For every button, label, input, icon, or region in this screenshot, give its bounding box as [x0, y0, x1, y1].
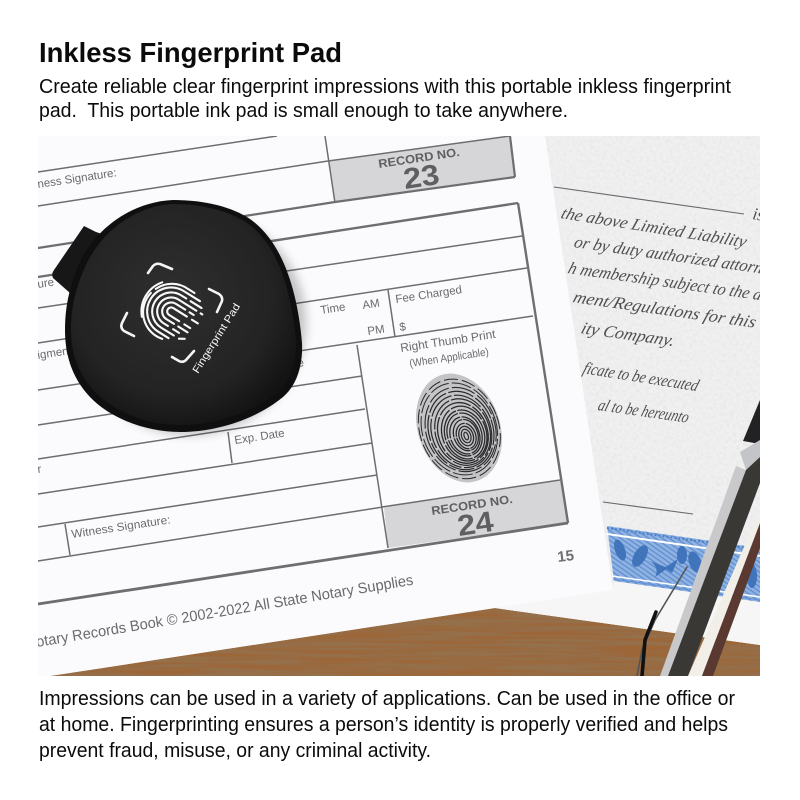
form lines [38, 136, 568, 604]
record number 23: 23 [401, 159, 442, 196]
form labels [37, 167, 497, 541]
record number 24: 24 [455, 506, 496, 543]
blue certificate border [607, 526, 760, 602]
hinge tab [52, 226, 100, 292]
device face [71, 204, 296, 425]
front page of record book [38, 136, 613, 676]
title: Inkless Fingerprint Pad [39, 37, 342, 68]
certificate document: is [751, 204, 766, 225]
record number boxes [328, 136, 568, 548]
wood table [50, 608, 760, 676]
form labels: e [297, 357, 305, 370]
form labels: ure [37, 277, 55, 291]
form labels: r [37, 464, 42, 476]
certificate document: ment/Regulations for this [571, 288, 759, 331]
intro text [39, 76, 731, 122]
form labels: Exp. Date [234, 428, 285, 447]
certificate document: ity Company. [579, 319, 678, 350]
photo: notary record book with fingerprint pad [35, 136, 766, 676]
certificate document: the above Limited Liability [559, 204, 750, 251]
device shadow [122, 224, 311, 440]
certificate document [495, 136, 766, 645]
page number: 15 [556, 547, 575, 566]
closing text: Impressions can be used in a variety of applications. Can be used in the office or [39, 688, 735, 710]
form labels: igmen [37, 345, 69, 362]
form labels: Time [320, 301, 346, 317]
intro text: Create reliable clear fingerprint impressions with this portable inkless fingerprint [39, 76, 731, 98]
form labels: Witness Signature: [71, 514, 171, 541]
closing text [39, 688, 735, 762]
inked thumb print [416, 374, 502, 482]
copyright line: otary Records Book © 2002-2022 All State Notary Supplies [35, 572, 415, 651]
scan frame brackets [121, 264, 222, 362]
form labels: AM [362, 298, 381, 312]
certificate document: al to be hereunto [596, 396, 692, 427]
fingerprint icon [140, 281, 204, 340]
form labels: (When Applicable) [409, 346, 490, 370]
record number 24 [432, 496, 512, 536]
form labels: $ [399, 321, 407, 334]
record number 24: RECORD NO. [430, 492, 514, 518]
form labels: Fee Charged [395, 284, 463, 306]
certificate document: h membership subject to the d [566, 259, 765, 304]
device label: Fingerprint Pad [190, 301, 243, 376]
certificate document: ficate to be executed [581, 359, 702, 395]
closing text: prevent fraud, misuse, or any criminal activity. [39, 740, 431, 762]
form labels: PM [367, 324, 386, 338]
fingerprint pad device [52, 200, 306, 435]
pen [660, 400, 760, 676]
closing text: at home. Fingerprinting ensures a person’s identity is properly verified and helps [39, 714, 728, 736]
certificate document: or by duty authorized attorn [572, 233, 766, 277]
form labels: Right Thumb Print [399, 327, 497, 355]
intro text: pad. This portable ink pad is small enough to take anywhere. [39, 100, 568, 122]
form labels: ness Signature: [37, 167, 117, 191]
record number 23: RECORD NO. [377, 145, 461, 171]
pen clip [637, 567, 687, 676]
record number 23 [378, 148, 460, 189]
device lip [65, 200, 302, 432]
